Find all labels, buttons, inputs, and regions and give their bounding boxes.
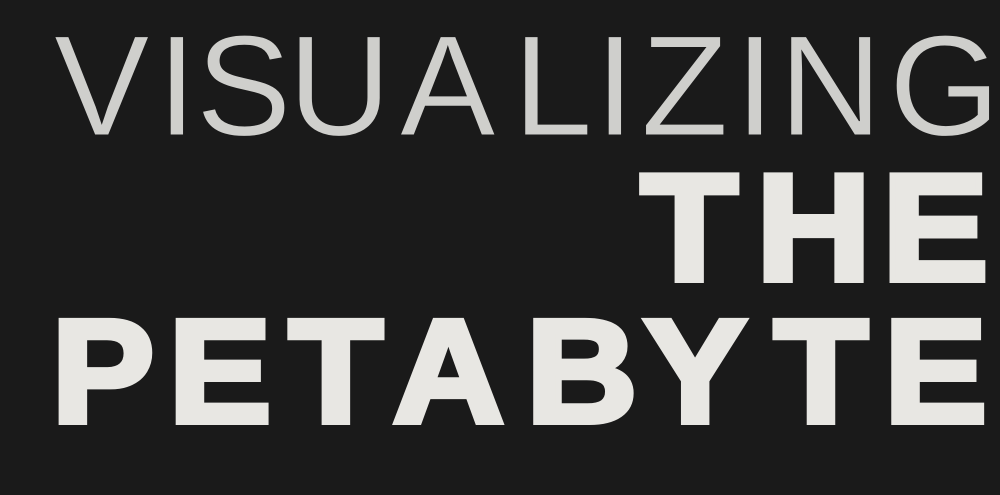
heading line: PETABYTE: PETABYTE — [51, 289, 987, 453]
heading line: THE: THE — [640, 143, 988, 313]
heading line: VISUALIZING: VISUALIZING — [54, 7, 1000, 166]
